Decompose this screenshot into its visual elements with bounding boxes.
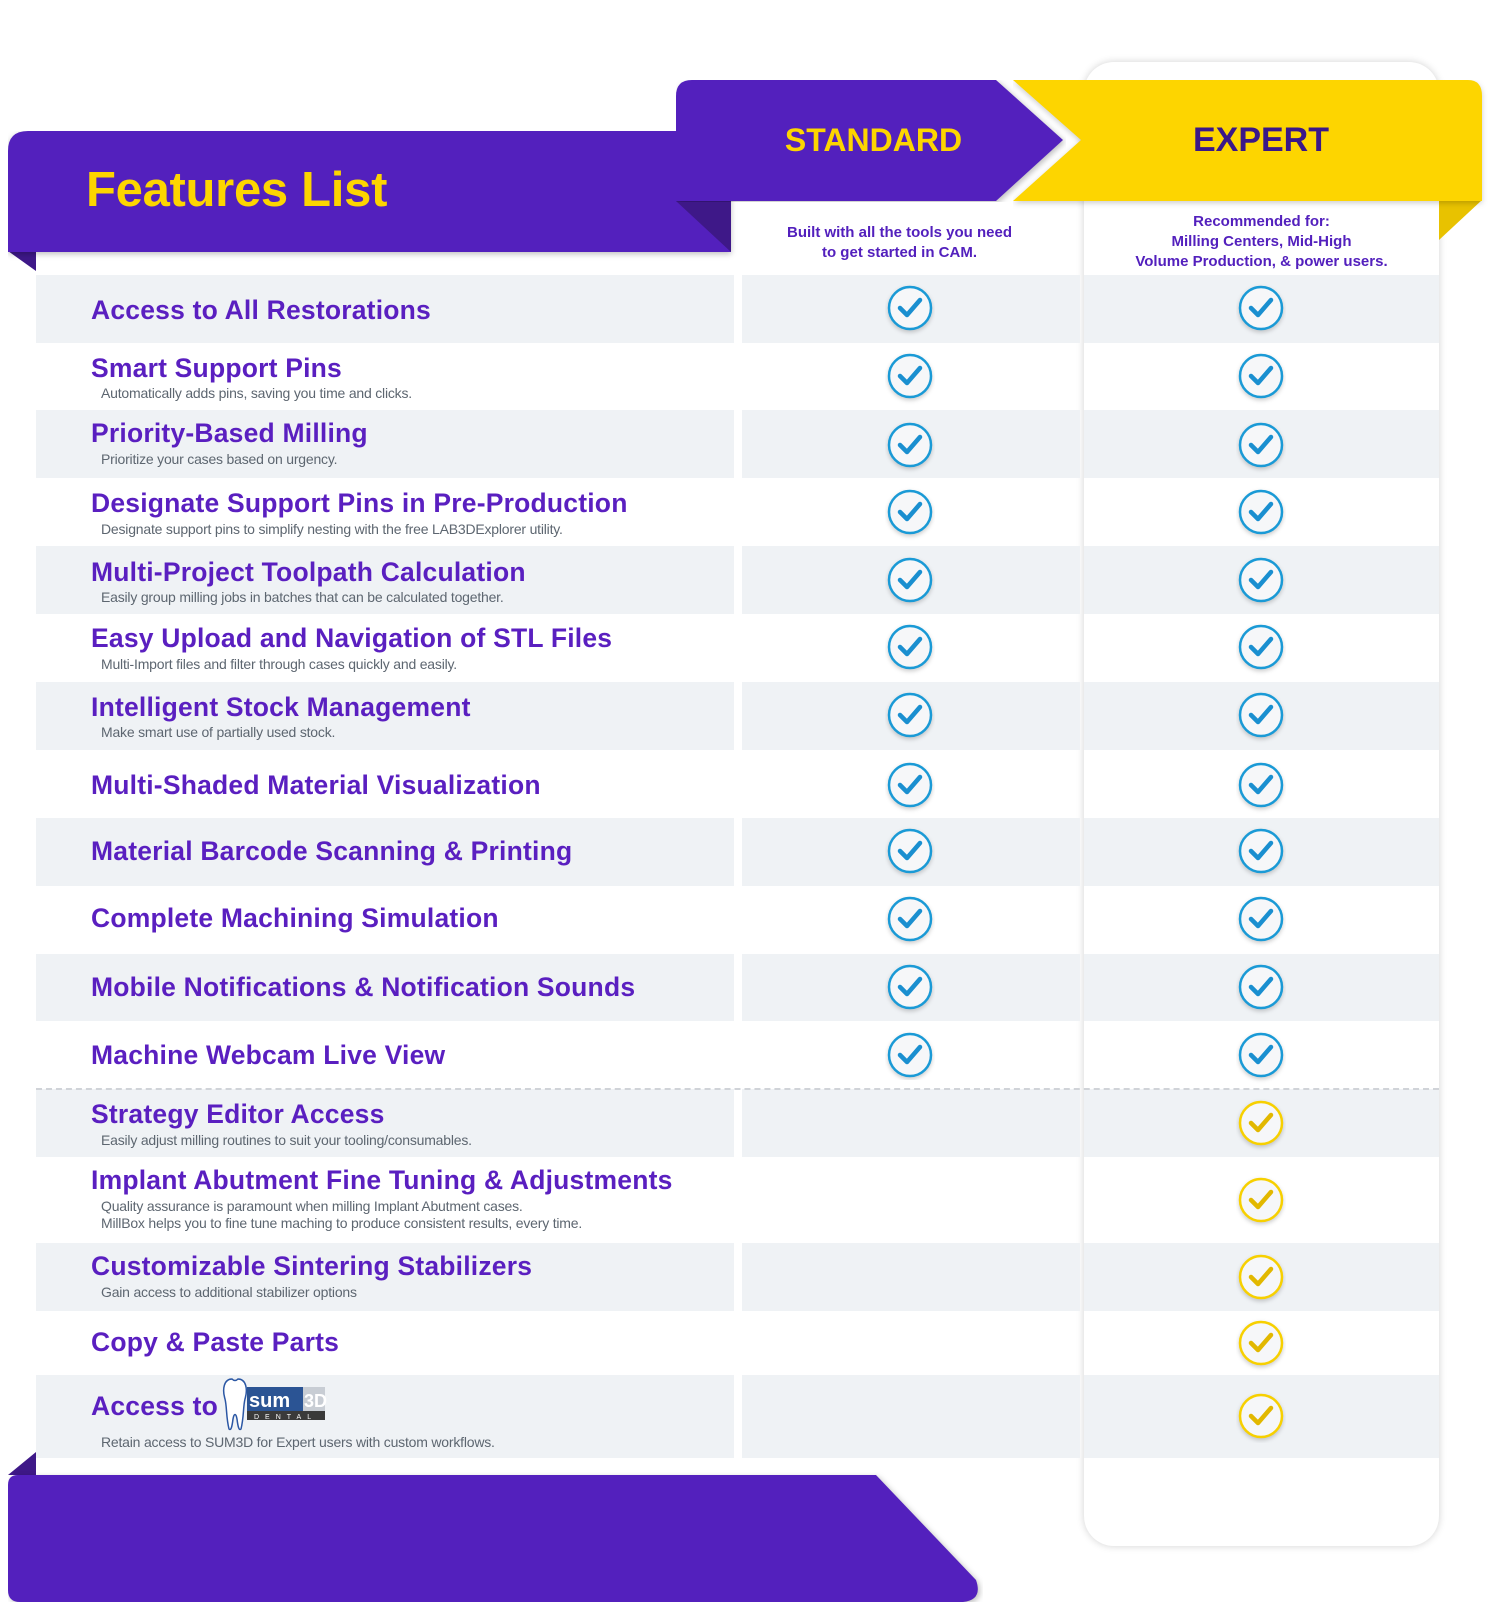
feature list: Priority-Based Milling <box>91 418 368 448</box>
feature list: Multi-Import files and filter through cases quickly and easily. <box>101 656 457 672</box>
feature list: Multi-Project Toolpath Calculation <box>91 557 526 587</box>
standard tab <box>676 80 1066 202</box>
standard description: Built with all the tools you need <box>787 224 1012 241</box>
feature list: Access to All Restorations <box>91 295 431 325</box>
feature list: Automatically adds pins, saving you time and clicks. <box>101 385 412 401</box>
feature list: Implant Abutment Fine Tuning & Adjustments <box>91 1165 673 1195</box>
checkmarks: expert column <box>1237 286 1285 1442</box>
logo: SUM3D dental <box>222 1378 327 1430</box>
logo: SUM3D dental: sum <box>249 1390 290 1412</box>
feature list: Mobile Notifications & Notification Sounds <box>91 972 635 1002</box>
feature list: Retain access to SUM3D for Expert users with custom workflows. <box>101 1434 495 1450</box>
logo: SUM3D dental: DENTAL <box>254 1414 317 1421</box>
feature list: Designate support pins to simplify nesting with the free LAB3DExplorer utility. <box>101 521 563 537</box>
feature list: Prioritize your cases based on urgency. <box>101 451 337 467</box>
feature list: Quality assurance is paramount when milling Implant Abutment cases. <box>101 1198 523 1214</box>
standard description: to get started in CAM. <box>822 244 977 261</box>
logo: SUM3D dental: 3D <box>304 1391 327 1411</box>
heading: STANDARD: STANDARD <box>785 122 962 158</box>
feature list: Access to <box>91 1391 218 1421</box>
feature list: Strategy Editor Access <box>91 1099 385 1129</box>
expert tab <box>1013 80 1484 240</box>
feature list: MillBox helps you to fine tune maching to produce consistent results, every time. <box>101 1215 582 1231</box>
heading: Features List: Features List <box>86 163 387 217</box>
feature list: Complete Machining Simulation <box>91 903 499 933</box>
feature list: Machine Webcam Live View <box>91 1040 445 1070</box>
feature list: Multi-Shaded Material Visualization <box>91 770 541 800</box>
checkmarks: standard column <box>886 286 934 1080</box>
title banner <box>8 131 734 271</box>
feature list: Smart Support Pins <box>91 353 342 383</box>
expert description: Recommended for: <box>1193 213 1330 230</box>
feature list <box>91 295 673 1450</box>
standard description <box>787 224 1012 261</box>
feature list: Make smart use of partially used stock. <box>101 724 335 740</box>
bottom banner <box>8 1452 982 1602</box>
feature list: Designate Support Pins in Pre-Production <box>91 488 628 518</box>
expert description <box>1135 213 1388 270</box>
feature list: Intelligent Stock Management <box>91 692 471 722</box>
expert description: Volume Production, & power users. <box>1135 253 1388 270</box>
feature list: Easily adjust milling routines to suit your tooling/consumables. <box>101 1132 472 1148</box>
feature list: Gain access to additional stabilizer options <box>101 1284 357 1300</box>
feature list: Customizable Sintering Stabilizers <box>91 1251 532 1281</box>
feature list: Material Barcode Scanning & Printing <box>91 836 572 866</box>
feature list: Easily group milling jobs in batches that can be calculated together. <box>101 589 504 605</box>
feature list: Easy Upload and Navigation of STL Files <box>91 623 612 653</box>
heading: EXPERT: EXPERT <box>1193 121 1329 159</box>
expert description: Milling Centers, Mid-High <box>1172 233 1352 250</box>
feature list: Copy & Paste Parts <box>91 1327 339 1357</box>
expert card <box>1084 62 1439 1546</box>
